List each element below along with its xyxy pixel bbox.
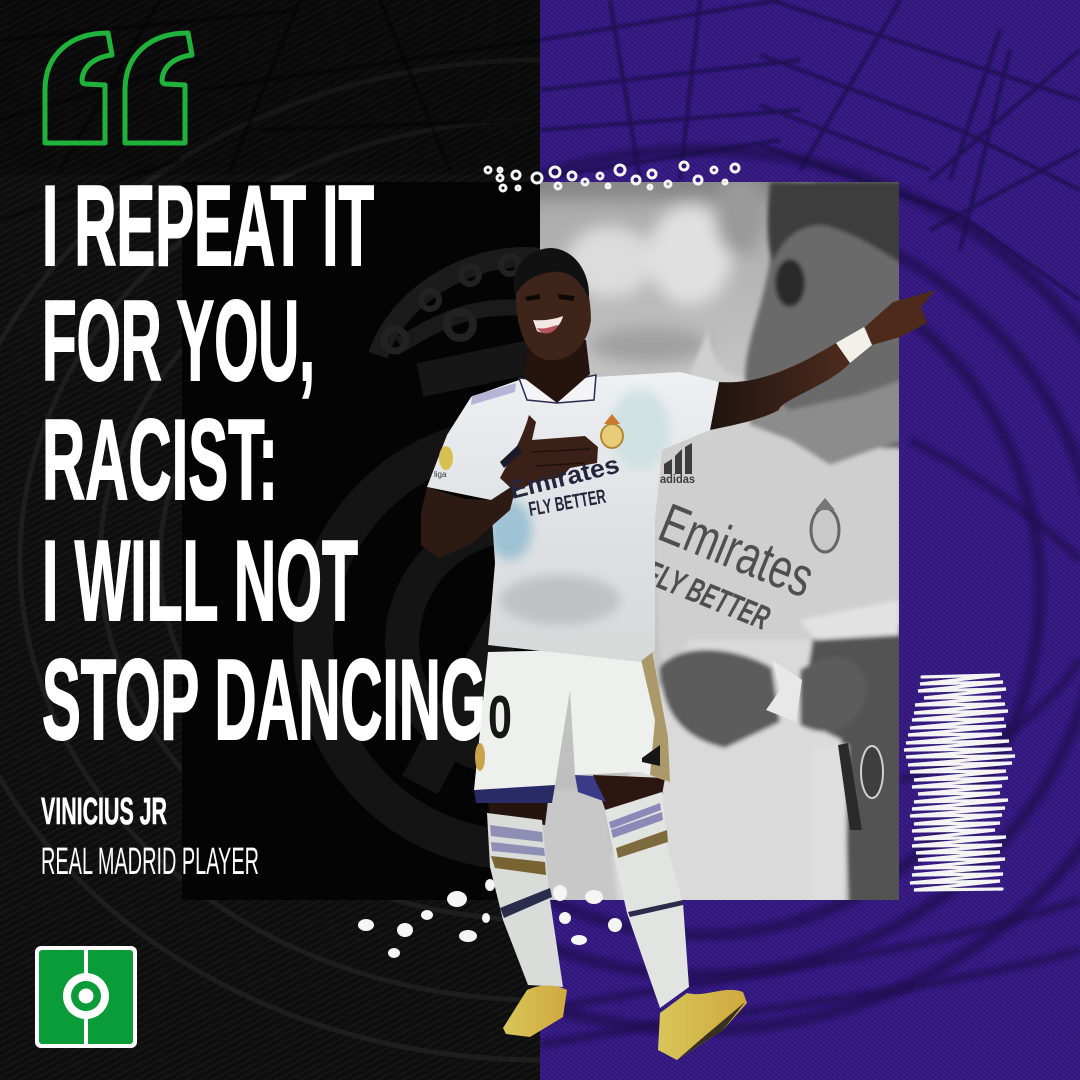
player cut-out (421, 248, 936, 1060)
enlarged player portrait (542, 182, 899, 900)
enlarged shirt sponsor: FLY BETTER (640, 554, 775, 638)
shorts number: 0 (488, 684, 512, 751)
headline quote: FOR YOU, (42, 278, 315, 405)
la liga patch: liga (434, 470, 447, 479)
splatter dots: top rings (485, 162, 739, 191)
shorts crest (475, 743, 485, 771)
left arm (421, 483, 517, 558)
watermark: Real Madrid crest (293, 247, 540, 868)
headline quote: I WILL NOT (42, 518, 358, 645)
attribution name: VINICIUS JR (41, 791, 167, 833)
blurred crowd (540, 182, 788, 368)
jersey sponsor: FLY BETTER (527, 486, 608, 521)
hand on chest (500, 415, 598, 492)
enlarged shirt crest (811, 498, 839, 552)
enlarged adidas logo: adidas (660, 472, 695, 486)
scribble (904, 675, 1015, 890)
left thigh (487, 785, 550, 825)
eyes (525, 294, 575, 301)
neck (524, 340, 590, 403)
head (516, 258, 591, 360)
pointing arm (710, 343, 850, 430)
jersey sponsor: Emirates (507, 451, 622, 505)
la liga patch (434, 446, 453, 479)
sleeve shading and wristband (766, 660, 802, 722)
black panel behind headline (182, 182, 540, 900)
logo: BeSoccer pitch (35, 946, 137, 1048)
enlarged adidas logo (660, 443, 695, 486)
headline quote (42, 163, 486, 764)
enlarged shirt sponsor (655, 504, 811, 630)
icon: opening quotation marks (45, 33, 192, 143)
headline quote: RACIST: (42, 397, 278, 524)
right thigh (593, 775, 665, 812)
right boot (658, 990, 747, 1060)
right sock (605, 792, 689, 1008)
headline quote: I REPEAT IT (42, 163, 374, 290)
left sock (487, 813, 563, 987)
jersey adidas mark (500, 445, 522, 468)
grey photo panel (540, 182, 899, 900)
shorts adidas logo (642, 745, 660, 766)
jersey crest (601, 414, 623, 448)
hair (514, 248, 589, 298)
mouth (533, 316, 563, 333)
attribution role: REAL MADRID PLAYER (41, 841, 259, 883)
headline quote: STOP DANCING (42, 637, 486, 764)
background: purple stadium half (540, 0, 1080, 1080)
hand (865, 290, 936, 345)
jersey (427, 372, 719, 662)
shorts (474, 648, 670, 792)
wrist band (836, 327, 872, 363)
splatter dots: bottom blobs (358, 879, 622, 958)
enlarged shirt sponsor: Emirates (651, 491, 823, 609)
left boot (503, 986, 567, 1037)
background: dark stadium half (0, 58, 540, 1080)
